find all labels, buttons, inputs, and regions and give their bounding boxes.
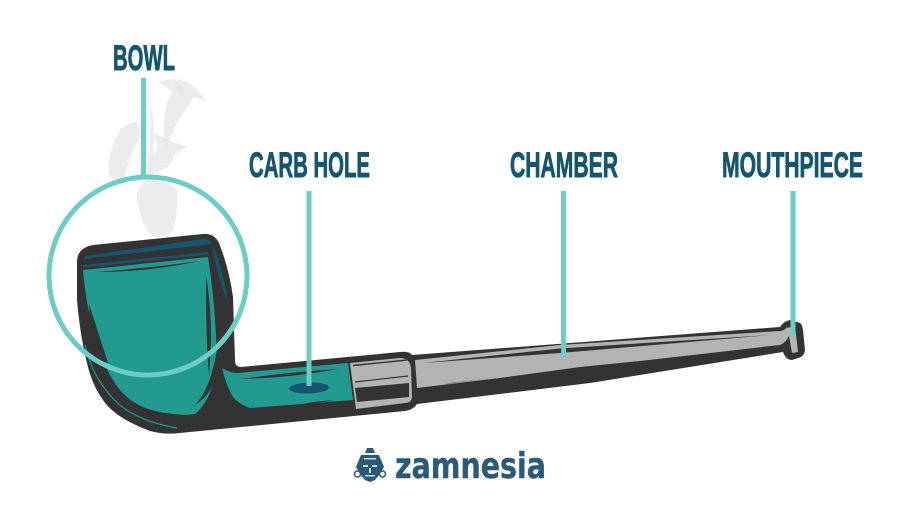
shank: shadow strokes [240, 369, 338, 405]
icon: smoke rising from the bowl [108, 79, 206, 237]
chamber stem in grey [415, 327, 789, 388]
bowl: highlights and shadows [89, 261, 217, 405]
logo wordmark: zamnesia [395, 446, 546, 487]
bowl: teal body [83, 257, 217, 415]
callout circle around bowl [49, 177, 247, 375]
mouthpiece tip [787, 326, 798, 353]
icon: tribal mask [354, 448, 386, 482]
shank: teal section [222, 363, 353, 408]
bowl: thin teal reflection along the base [85, 345, 177, 428]
callout line: mouthpiece [790, 191, 796, 335]
logo: zamnesia [354, 446, 546, 487]
pipe outline silhouette [77, 234, 805, 434]
callout line: bowl [141, 78, 146, 178]
label: chamber: CHAMBER [510, 146, 618, 185]
bowl: navy rim [83, 239, 228, 302]
label: bowl: BOWL [113, 39, 175, 78]
callout line: carb hole [306, 191, 312, 386]
callout line: chamber [561, 191, 566, 358]
label: carb hole: CARB HOLE [249, 146, 370, 185]
ferrule band [350, 358, 412, 409]
carb hole opening [289, 382, 329, 394]
pipe illustration [77, 234, 805, 434]
